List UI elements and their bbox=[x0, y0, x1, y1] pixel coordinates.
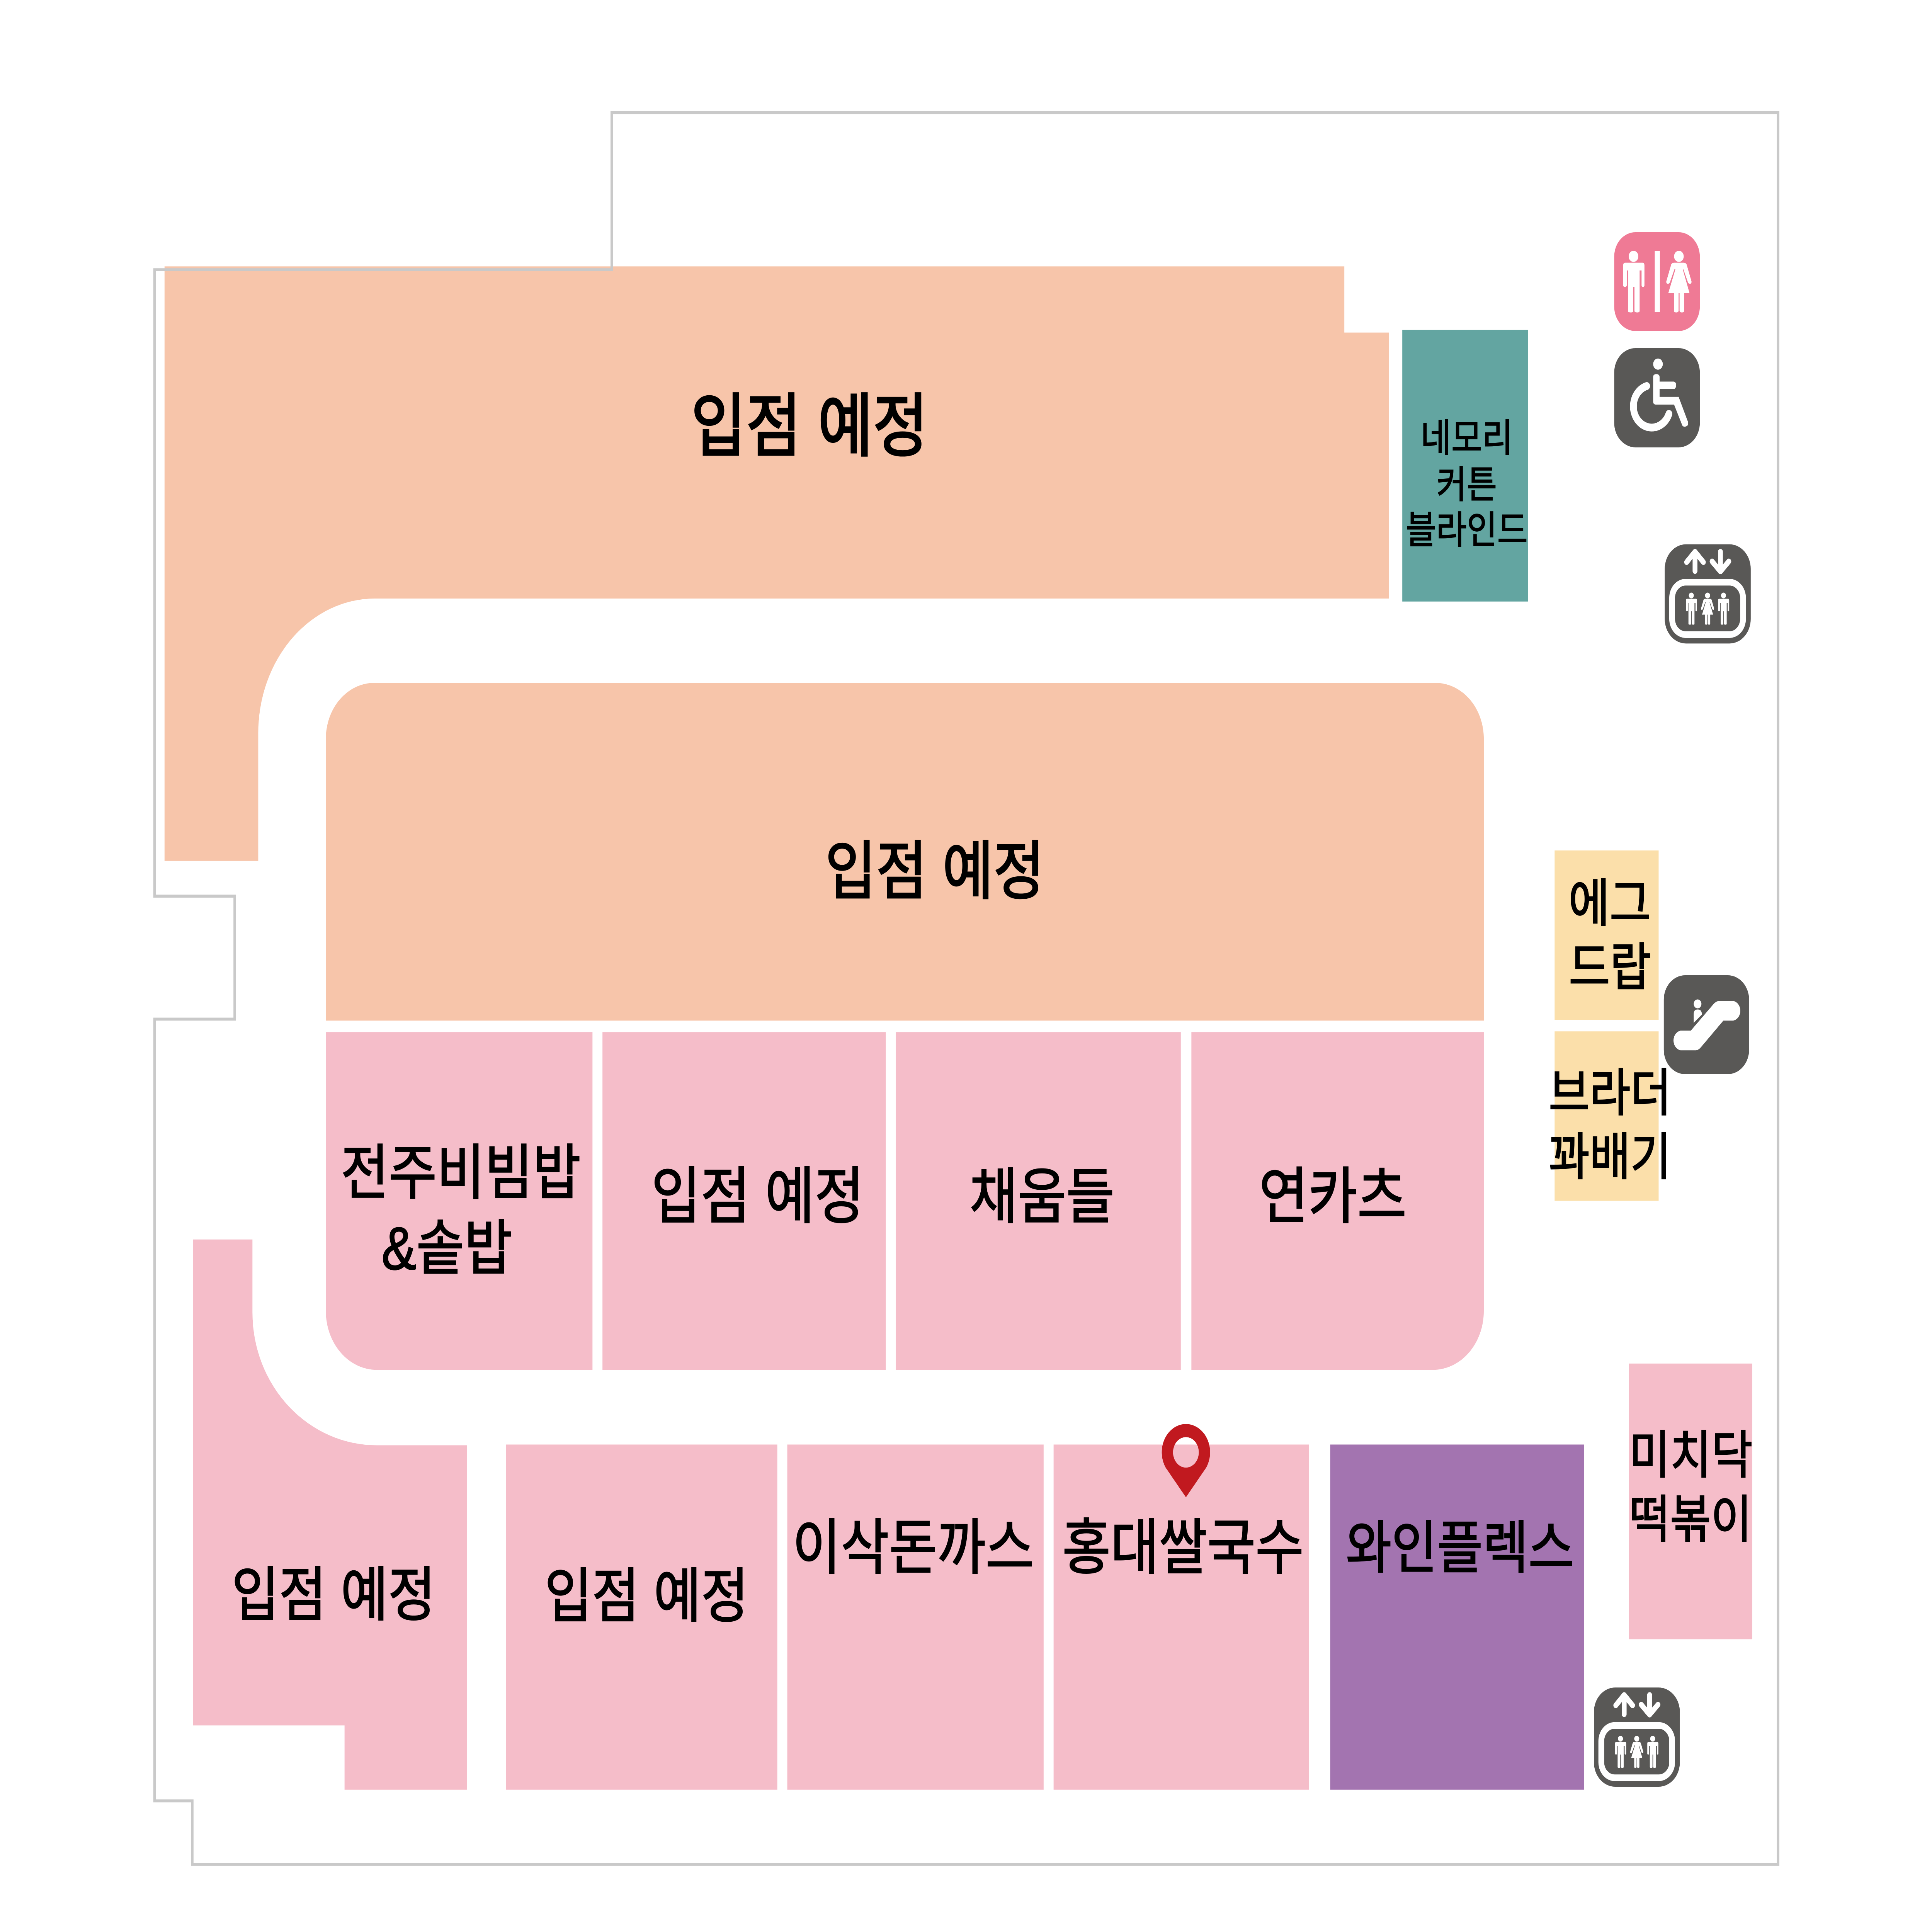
shop: hongdae rice noodles bbox=[1054, 1444, 1309, 1790]
shop: hongdae rice noodles: 홍대쌀국수 bbox=[1062, 1514, 1304, 1582]
shop: egg drop: 드랍 bbox=[1569, 939, 1651, 997]
shop: brother twisted donuts: 브라더 bbox=[1549, 1065, 1671, 1122]
shop: chaeumdeul bbox=[896, 1032, 1181, 1370]
icon: elevator lower bbox=[1594, 1687, 1680, 1787]
shop: lower coming soon bbox=[506, 1444, 777, 1790]
shop: wine plex bbox=[1330, 1444, 1584, 1790]
shop: jeonju bibimbap: 전주비빔밥 bbox=[341, 1139, 581, 1207]
shop: central large unit bbox=[326, 683, 1484, 1020]
shop: lower coming soon: 입점 예정 bbox=[545, 1563, 748, 1630]
icon: wheelchair accessible bbox=[1614, 348, 1700, 447]
shop: jeonju bibimbap bbox=[326, 1032, 592, 1370]
shop: nemori curtain blind: 커튼 bbox=[1437, 464, 1497, 506]
shop: central row coming soon bbox=[602, 1032, 886, 1370]
shop: isak donkatsu bbox=[787, 1444, 1044, 1790]
shop: michidak tteokbokki: 떡볶이 bbox=[1629, 1492, 1752, 1549]
shop: jeonju bibimbap: &솥밥 bbox=[381, 1215, 512, 1282]
shop: michidak tteokbokki: 미치닥 bbox=[1629, 1427, 1753, 1484]
shop: nemori curtain blind: 블라인드 bbox=[1406, 509, 1528, 551]
shop: central large unit: 입점 예정 bbox=[825, 836, 1044, 907]
shop: lower-left coming soon bbox=[193, 1240, 467, 1790]
shop: yeon katsu: 연카츠 bbox=[1259, 1162, 1406, 1231]
shop: egg drop: 에그 bbox=[1568, 875, 1651, 932]
shop: upper L-shaped unit: 입점 예정 bbox=[691, 388, 928, 465]
shop: nemori curtain blind: 네모리 bbox=[1420, 416, 1513, 460]
icon: escalator bbox=[1664, 975, 1749, 1074]
building outline bbox=[155, 112, 1778, 1864]
icon: location pin bbox=[1162, 1424, 1210, 1497]
shop: egg drop bbox=[1554, 850, 1658, 1020]
shop: isak donkatsu: 이삭돈까스 bbox=[793, 1514, 1034, 1582]
shop: chaeumdeul: 채움들 bbox=[969, 1163, 1114, 1231]
shop: brother twisted donuts: 꽈배기 bbox=[1549, 1129, 1671, 1186]
icon: restroom bbox=[1614, 232, 1700, 331]
shop: yeon katsu bbox=[1191, 1032, 1484, 1370]
shop: michidak tteokbokki bbox=[1629, 1364, 1753, 1639]
icon: elevator upper bbox=[1665, 544, 1751, 643]
shop: lower-left coming soon: 입점 예정 bbox=[232, 1562, 435, 1628]
shop: central row coming soon: 입점 예정 bbox=[651, 1162, 864, 1231]
shop: nemori curtain blind bbox=[1402, 330, 1528, 602]
shop: wine plex: 와인플렉스 bbox=[1346, 1517, 1574, 1580]
shop: upper L-shaped unit bbox=[165, 266, 1389, 861]
shop: brother twisted donuts bbox=[1549, 1031, 1671, 1201]
